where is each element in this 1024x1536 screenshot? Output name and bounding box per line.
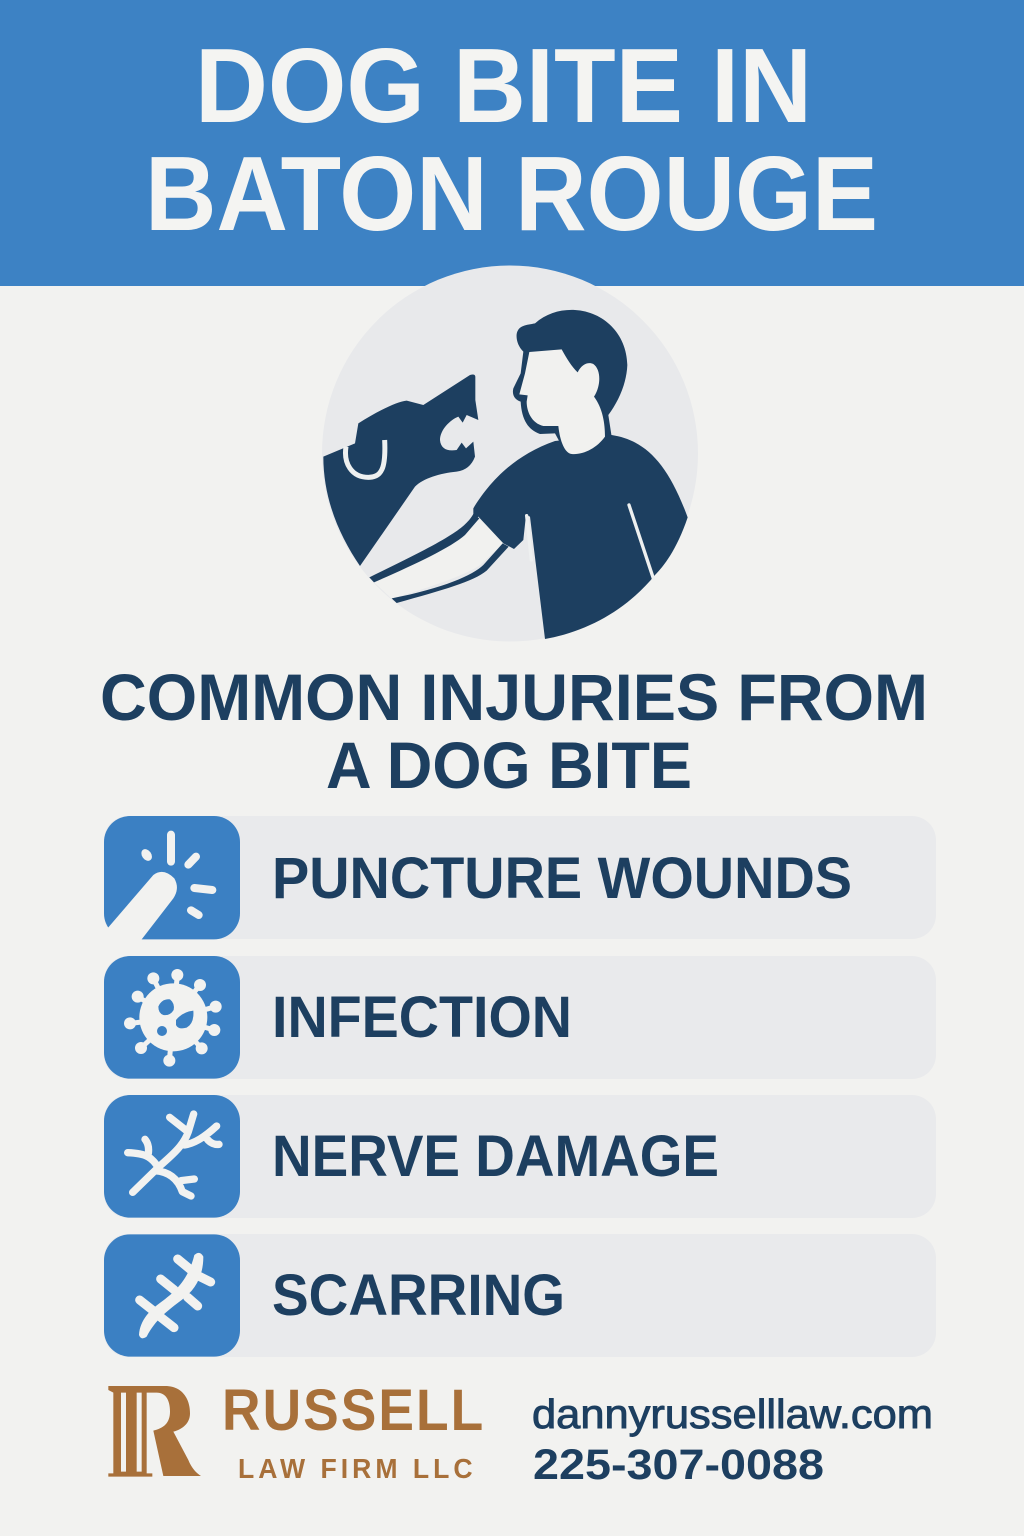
footer: law firm logo <box>108 1378 483 1484</box>
row: puncture wounds <box>101 816 936 942</box>
illustration: dog attacking man <box>322 266 698 642</box>
icon: virus <box>104 956 240 1079</box>
label: INFECTION <box>272 985 572 1050</box>
icon: puncture <box>101 816 240 942</box>
icon: R column monogram <box>108 1386 201 1477</box>
heading: common injuries: A DOG BITE <box>326 728 692 802</box>
icon: dog head <box>323 374 478 566</box>
icon: nerve <box>104 1095 240 1218</box>
footer: contact details: 225-307-0088 <box>533 1441 824 1489</box>
label: SCARRING <box>272 1263 565 1328</box>
header banner <box>0 0 1024 286</box>
row: nerve damage <box>104 1095 936 1218</box>
icon: arm <box>369 514 509 603</box>
footer: law firm logo: RUSSELL <box>222 1378 483 1442</box>
label: PUNCTURE WOUNDS <box>272 846 852 911</box>
title <box>145 27 878 253</box>
icon: man <box>473 310 688 639</box>
title: DOG BITE IN <box>195 27 812 145</box>
footer: contact details: dannyrusselllaw.com <box>532 1391 933 1437</box>
row: infection <box>104 956 936 1079</box>
label: NERVE DAMAGE <box>272 1124 719 1189</box>
footer: contact details <box>532 1391 933 1489</box>
row: scarring <box>104 1234 936 1357</box>
icon: scar <box>104 1234 240 1357</box>
heading: common injuries: COMMON INJURIES FROM <box>100 660 928 734</box>
heading: common injuries <box>100 660 928 802</box>
title: BATON ROUGE <box>145 135 878 253</box>
footer: law firm logo: LAW FIRM LLC <box>238 1452 473 1484</box>
